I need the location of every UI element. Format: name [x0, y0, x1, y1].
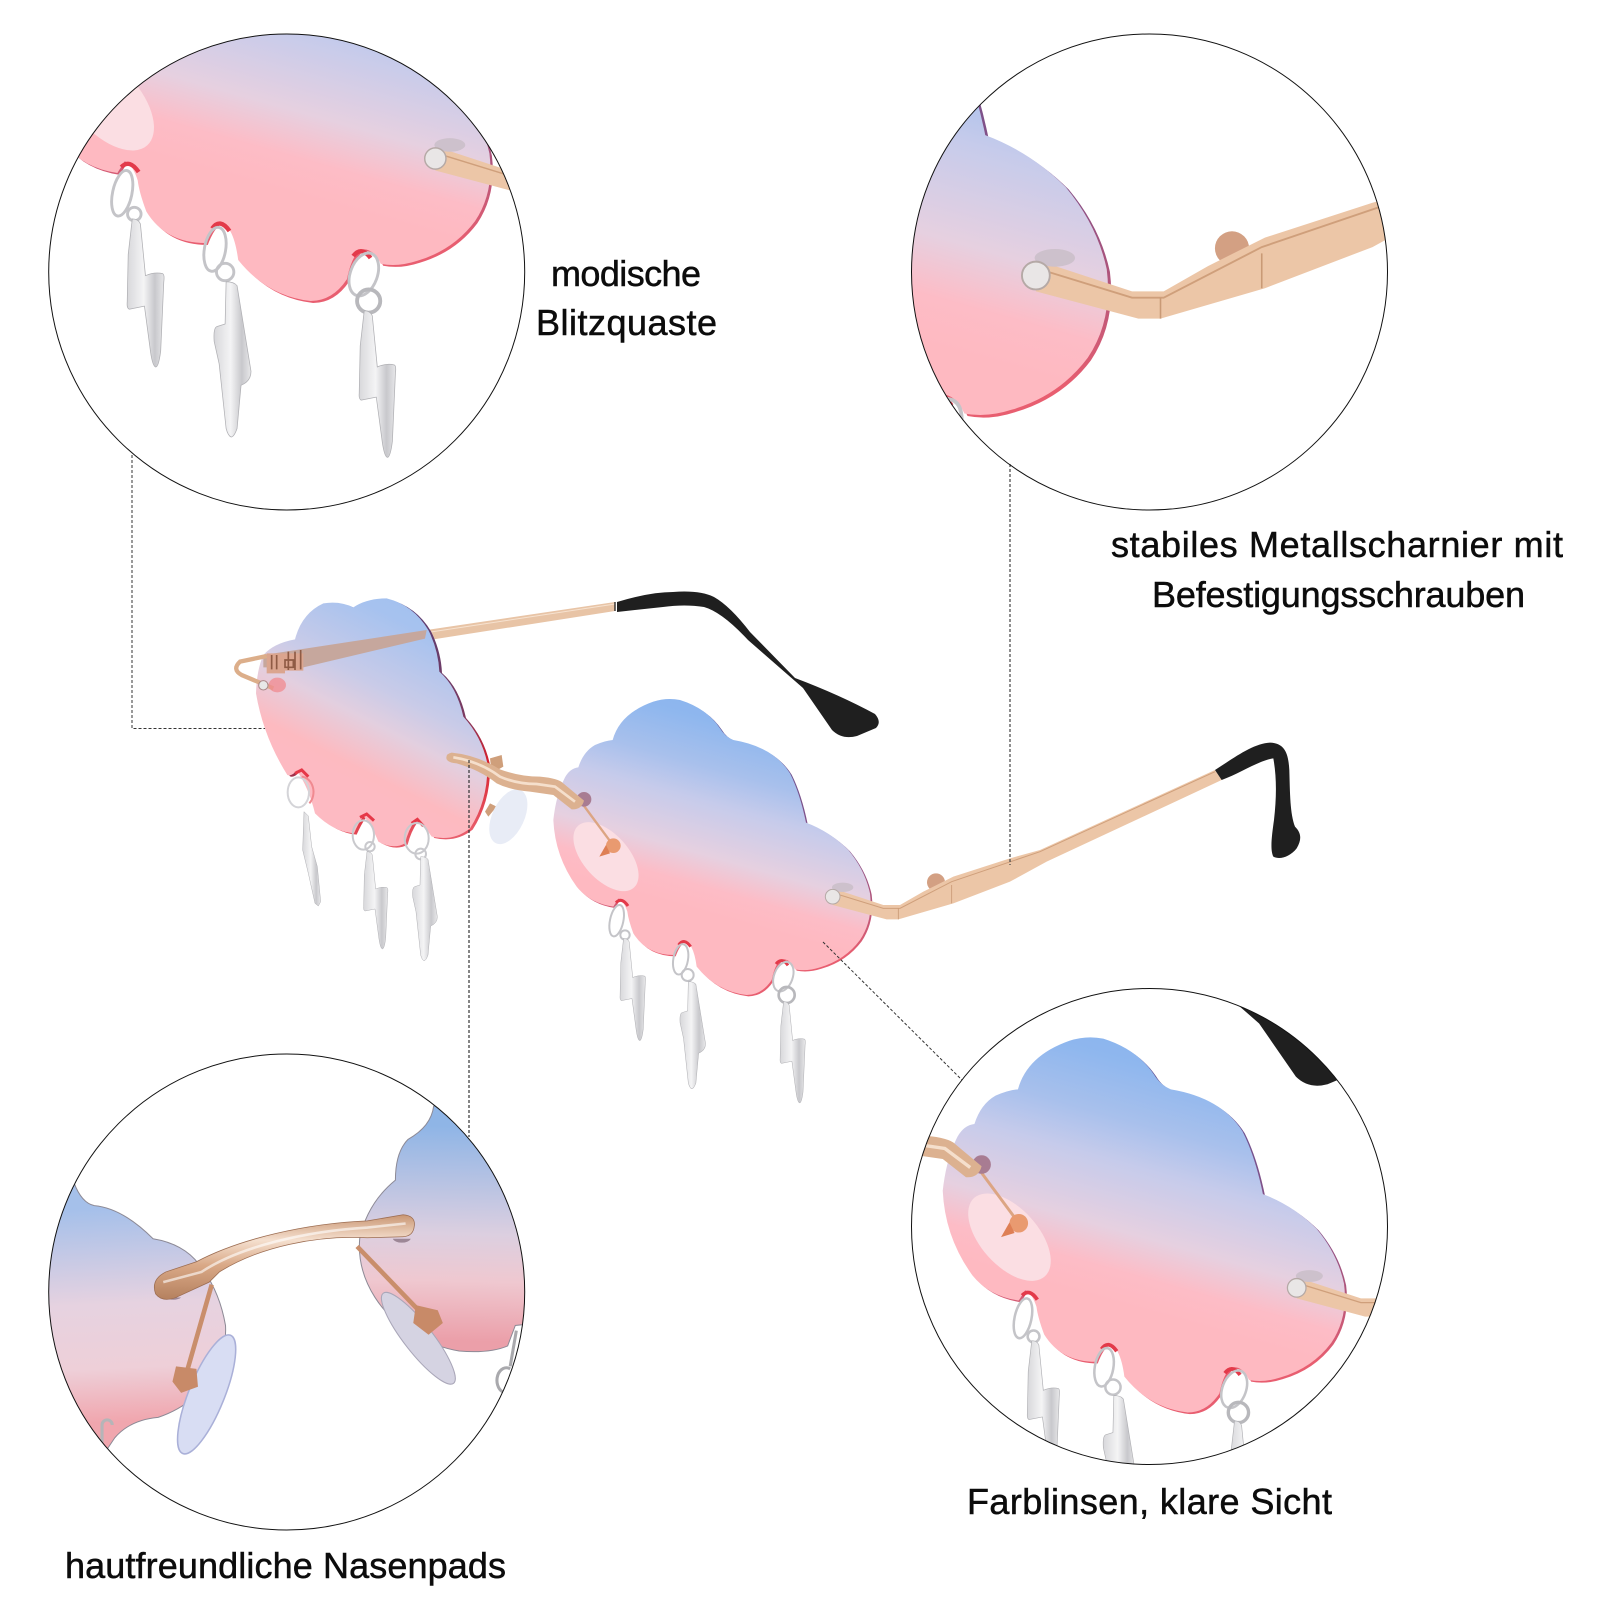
label: tassel: modische [551, 253, 701, 294]
label: lens: Farblinsen, klare Sicht [967, 1481, 1332, 1522]
circle: tassel detail [48, 34, 526, 510]
hinge rivet [825, 883, 853, 904]
tassel bolt [364, 852, 388, 949]
circle: lens detail [911, 988, 1388, 1465]
left rivet [259, 681, 268, 690]
tassel bolt 1 [620, 938, 646, 1041]
tassel bolt 2 [680, 982, 705, 1089]
bridge highlight [453, 757, 575, 802]
tassel spike [303, 812, 321, 906]
gold bridge [154, 1215, 414, 1299]
tassel bolt 3 [780, 1002, 805, 1103]
rings [288, 777, 429, 859]
circle: nose pad detail [48, 1054, 526, 1530]
right nose pad [380, 1292, 456, 1385]
rings [607, 904, 797, 1003]
label: hinge: Befestigungsschrauben [1152, 574, 1525, 615]
bridge rivet [577, 792, 591, 807]
left temple far side [427, 602, 615, 639]
left lens with tassels [236, 598, 490, 961]
right temple [833, 743, 1300, 919]
right lens with tassels [553, 699, 872, 1103]
hinge screw [927, 873, 945, 891]
holes [295, 770, 423, 826]
dashed connector: lens [823, 942, 962, 1080]
black temple tip [1215, 743, 1300, 858]
pad blocks [172, 1305, 443, 1393]
dashed connector: hinge [1009, 464, 1011, 865]
left nose pad [176, 1334, 236, 1455]
hinge screws [267, 653, 303, 673]
bridge highlight [163, 1223, 406, 1282]
near nose pad [561, 811, 651, 903]
tassel ring left [102, 1420, 112, 1443]
holes [616, 900, 788, 965]
temple arm [833, 770, 1222, 919]
circle: hinge detail [911, 34, 1388, 510]
dashed connector: tassel callout [132, 455, 269, 728]
left lens part [49, 1184, 226, 1448]
tassel bolt bent [413, 857, 437, 961]
label: tassel [536, 253, 717, 343]
bridge rivets [166, 1239, 411, 1300]
far nose pad [481, 783, 535, 850]
pad screw [606, 838, 621, 853]
product photo: cloud sunglasses [236, 592, 1300, 1103]
right lens part [358, 1106, 524, 1352]
nose bridge [446, 753, 584, 809]
label: hinge [1111, 524, 1563, 615]
tassel ring right [497, 1331, 516, 1392]
dashed connector: nose pads [468, 760, 470, 1137]
pad arm [583, 805, 612, 843]
left hook arm [236, 656, 273, 688]
label: hinge: stabiles Metallscharnier mit [1111, 524, 1563, 565]
pad arms [186, 1246, 423, 1374]
far nose pad holder [485, 755, 503, 817]
label: tassel: Blitzquaste [536, 302, 717, 343]
lens-tinted temple [263, 630, 427, 667]
label: nose pads: hautfreundliche Nasenpads [65, 1545, 506, 1586]
left temple black tip [617, 592, 879, 737]
